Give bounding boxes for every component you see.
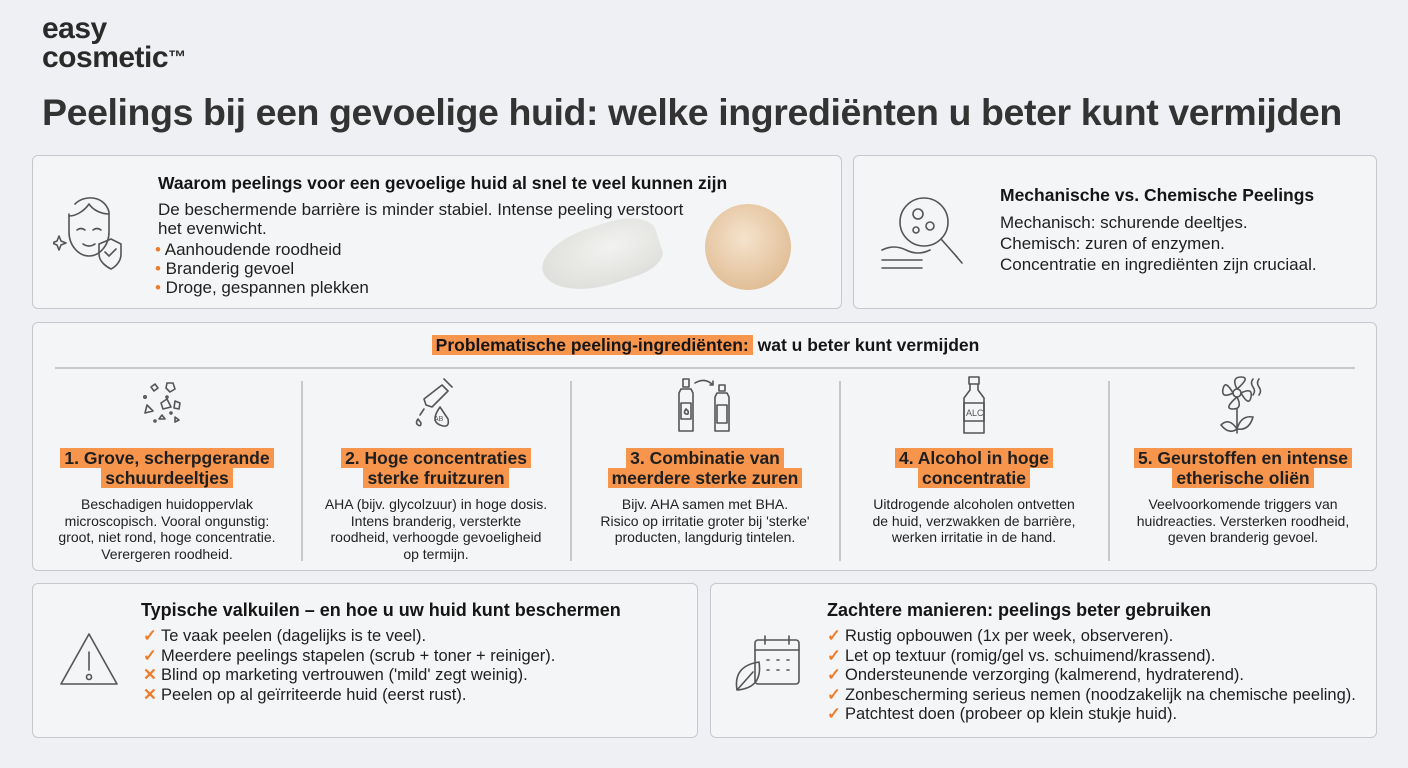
column 5: 5. Geurstoffen en intense bbox=[1138, 448, 1348, 468]
column 4: 4. Alcohol in hoge bbox=[899, 448, 1049, 468]
icon: alcohol bottle bbox=[963, 376, 985, 434]
icon: dropper bbox=[416, 378, 453, 427]
bullet list: • Droge, gespannen plekken bbox=[155, 278, 369, 297]
bullet list: • Aanhoudende roodheid bbox=[155, 240, 342, 259]
list: ✓ bbox=[827, 627, 841, 645]
list: Patchtest doen (probeer op klein stukje huid). bbox=[845, 705, 1177, 723]
icon: calendar with leaf bbox=[736, 635, 800, 691]
text bbox=[1000, 213, 1317, 274]
panel: gentler ways bbox=[710, 583, 1377, 738]
icon: two bottles bbox=[678, 378, 730, 432]
icon: magnifier over skin bbox=[881, 197, 963, 269]
list: ✓ bbox=[827, 686, 841, 704]
list: Te vaak peelen (dagelijks is te veel). bbox=[161, 627, 426, 645]
bullet list bbox=[155, 240, 369, 297]
icon: flower bbox=[1220, 376, 1262, 434]
column 5: Veelvoorkomende triggers van bbox=[1148, 496, 1338, 512]
panel: problematic ingredients bbox=[32, 322, 1377, 571]
list: Ondersteunende verzorging (kalmerend, hydraterend). bbox=[845, 666, 1244, 684]
list bbox=[143, 627, 555, 704]
column 2: sterke fruitzuren bbox=[367, 468, 505, 488]
heading: Mechanische vs. Chemische Peelings bbox=[1000, 185, 1314, 205]
list: Peelen op al geïrriteerde huid (eerst rust). bbox=[161, 686, 466, 704]
column 4 bbox=[872, 376, 1076, 545]
column 1: groot, niet rond, hoge concentratie. bbox=[58, 529, 276, 545]
list: Blind op marketing vertrouwen ('mild' zegt weinig). bbox=[161, 666, 528, 684]
text: De beschermende barrière is minder stabiel. Intense peeling verstoort het evenwicht. bbox=[158, 200, 683, 238]
column 3: meerdere sterke zuren bbox=[612, 468, 798, 488]
list: ✓ bbox=[827, 666, 841, 684]
column 5 bbox=[1134, 376, 1352, 545]
list: ✕ bbox=[143, 686, 157, 704]
column 5: huidreacties. Versterken roodheid, bbox=[1137, 512, 1349, 528]
column 2: op termijn. bbox=[403, 546, 469, 562]
column 2: Intens branderig, versterkte bbox=[351, 512, 521, 528]
column 4: concentratie bbox=[922, 468, 1026, 488]
list bbox=[827, 627, 1356, 723]
icon: face with shield bbox=[53, 197, 122, 270]
heading: Typische valkuilen – en hoe u uw huid kunt beschermen bbox=[141, 600, 621, 620]
column 2: AHA (bijv. glycolzuur) in hoge dosis. bbox=[325, 496, 547, 512]
icon: warning bbox=[60, 633, 118, 685]
column 4: de huid, verzwakken de barrière, bbox=[872, 512, 1076, 528]
image: cream smear bbox=[535, 209, 667, 303]
column 4: Uitdrogende alcoholen ontvetten bbox=[873, 496, 1075, 512]
bullet list: • Branderig gevoel bbox=[155, 259, 294, 278]
list: Let op textuur (romig/gel vs. schuimend/krassend). bbox=[845, 646, 1216, 664]
column 2: 2. Hoge concentraties bbox=[345, 448, 527, 468]
panel: mechanical vs chemical bbox=[853, 155, 1377, 309]
logo bbox=[42, 12, 186, 74]
icon: alcohol bottle: ALC bbox=[966, 408, 984, 418]
text: Mechanisch: schurende deeltjes. bbox=[1000, 213, 1248, 232]
column 3 bbox=[600, 378, 810, 545]
list: ✓ bbox=[827, 705, 841, 723]
column 4: werken irritatie in de hand. bbox=[892, 529, 1056, 545]
icon: particles bbox=[143, 382, 181, 423]
column 2: roodheid, verhoogde gevoeligheid bbox=[331, 529, 541, 545]
list: ✓ bbox=[143, 646, 157, 664]
list: Meerdere peelings stapelen (scrub + toner + reiniger). bbox=[161, 646, 555, 664]
column 3: Risico op irritatie groter bij 'sterke' bbox=[600, 512, 810, 528]
list: ✓ bbox=[143, 627, 157, 645]
list: ✓ bbox=[827, 646, 841, 664]
column 1: Beschadigen huidoppervlak bbox=[81, 496, 253, 512]
column 1: 1. Grove, scherpgerande bbox=[64, 448, 270, 468]
column 1 bbox=[58, 382, 276, 562]
text: Chemisch: zuren of enzymen. bbox=[1000, 234, 1225, 253]
column 1: schuurdeeltjes bbox=[105, 468, 229, 488]
column 2 bbox=[324, 378, 547, 562]
icon: dropper: AB bbox=[434, 416, 444, 423]
column 5: geven branderig gevoel. bbox=[1168, 529, 1318, 545]
logo: cosmetic™ bbox=[42, 41, 186, 74]
column 3: Bijv. AHA samen met BHA. bbox=[622, 496, 788, 512]
list: ✕ bbox=[143, 666, 157, 684]
column 3: 3. Combinatie van bbox=[630, 448, 780, 468]
image: gel drop bbox=[705, 204, 791, 290]
text: Concentratie en ingrediënten zijn cruciaal. bbox=[1000, 255, 1317, 274]
column 1: Verergeren roodheid. bbox=[101, 546, 233, 562]
heading: Zachtere manieren: peelings beter gebruiken bbox=[827, 600, 1211, 620]
heading: Problematische peeling-ingrediënten: wat u beter kunt vermijden bbox=[436, 335, 979, 355]
column 5: etherische oliën bbox=[1176, 468, 1310, 488]
panel: why sensitive skin bbox=[32, 155, 842, 309]
title: Peelings bij een gevoelige huid: welke ingrediënten u beter kunt vermijden bbox=[42, 91, 1342, 133]
list: Zonbescherming serieus nemen (noodzakelijk na chemische peeling). bbox=[845, 686, 1356, 704]
logo: easy bbox=[42, 12, 107, 45]
list: Rustig opbouwen (1x per week, observeren). bbox=[845, 627, 1173, 645]
column 3: producten, langdurig tintelen. bbox=[615, 529, 795, 545]
heading: Waarom peelings voor een gevoelige huid al snel te veel kunnen zijn bbox=[158, 173, 727, 193]
column 1: microscopisch. Vooral ongunstig: bbox=[65, 512, 269, 528]
panel: pitfalls bbox=[32, 583, 698, 738]
